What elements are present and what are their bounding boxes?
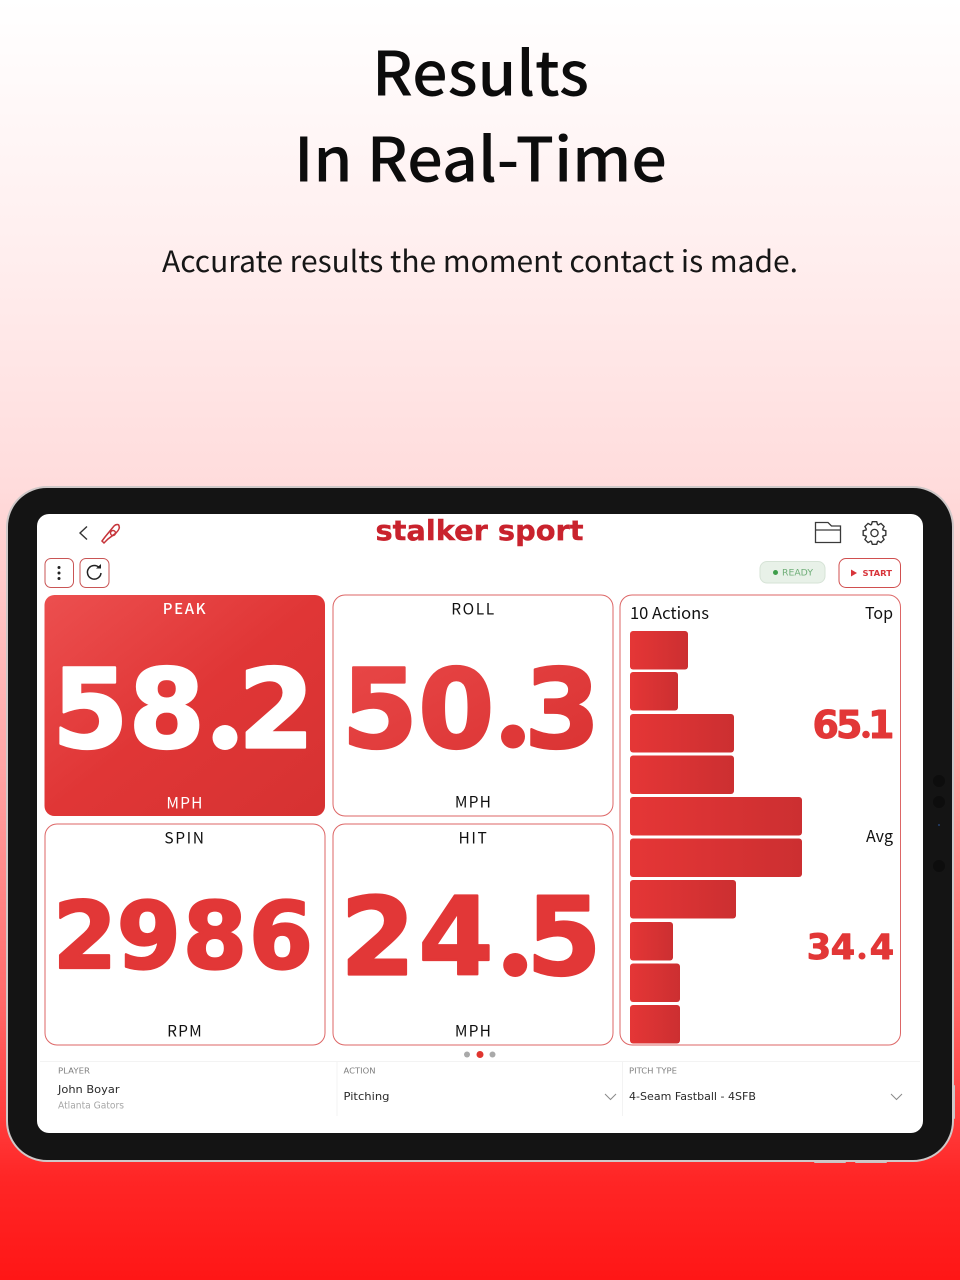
- label: avg: Avg: [866, 823, 894, 847]
- action selector: [344, 1066, 616, 1103]
- value: top speed: 65.1: [812, 703, 894, 747]
- camera dots: [933, 775, 945, 872]
- panel: peak: MPH: [166, 792, 204, 814]
- title: In Real-Time: [294, 110, 667, 200]
- logo: stalker sport: stalker sport: [376, 514, 584, 547]
- start button: START: [862, 569, 893, 578]
- panel: spin: 2986: [53, 882, 313, 990]
- player selector: [57, 1066, 124, 1112]
- subtitle: Accurate results the moment contact is made.: [162, 239, 798, 281]
- panel: roll: ROLL: [451, 598, 496, 620]
- heading: 10 actions: 10 Actions: [630, 600, 709, 624]
- icon: back chevron: [80, 526, 87, 540]
- bar chart: [630, 631, 802, 1044]
- panel: roll: MPH: [455, 790, 492, 812]
- pitch type selector: 4-Seam Fastball - 4SFB: [629, 1091, 756, 1103]
- tablet frame: [7, 487, 953, 1161]
- action selector: Pitching: [344, 1091, 390, 1103]
- pitch type selector: PITCH TYPE: [629, 1066, 677, 1076]
- icon: folder: [816, 522, 840, 542]
- panel: hit: MPH: [455, 1020, 492, 1042]
- panel: spin: [45, 824, 325, 1045]
- tablet device: [7, 487, 955, 1163]
- panel: peak: PEAK: [163, 598, 207, 619]
- panel: roll: 50.3: [342, 646, 601, 774]
- panel: hit: HIT: [459, 826, 488, 848]
- icon: bat and ball: [102, 524, 119, 543]
- label: top: Top: [865, 600, 893, 624]
- ready status pill: [760, 562, 825, 583]
- player selector: Atlanta Gators: [58, 1100, 124, 1112]
- player selector: PLAYER: [58, 1066, 90, 1076]
- refresh button: [80, 558, 109, 588]
- value: average speed: 34.4: [807, 928, 894, 968]
- panel: spin: SPIN: [164, 826, 206, 848]
- action selector: ACTION: [344, 1066, 376, 1076]
- tablet screen: [37, 514, 923, 1133]
- pitch type selector: [629, 1066, 902, 1103]
- panel: last 10 actions: [620, 595, 900, 1045]
- icon: gear: [863, 522, 886, 544]
- panel: peak: 58.2: [52, 646, 315, 774]
- title: Results: [372, 24, 589, 114]
- start button: [839, 558, 900, 588]
- panel: peak: [44, 595, 325, 816]
- tablet hardware buttons: [814, 1085, 955, 1163]
- panel: hit: [333, 824, 613, 1045]
- panel: roll: [333, 595, 613, 816]
- title: [294, 24, 667, 200]
- player selector: John Boyar: [57, 1084, 120, 1096]
- pagination dots: [464, 1051, 496, 1058]
- panel: hit: 24.5: [340, 876, 602, 1000]
- footer dividers: [40, 1062, 920, 1116]
- ready status pill: READY: [782, 568, 814, 578]
- panel: spin: RPM: [167, 1020, 203, 1042]
- menu button: [45, 558, 74, 588]
